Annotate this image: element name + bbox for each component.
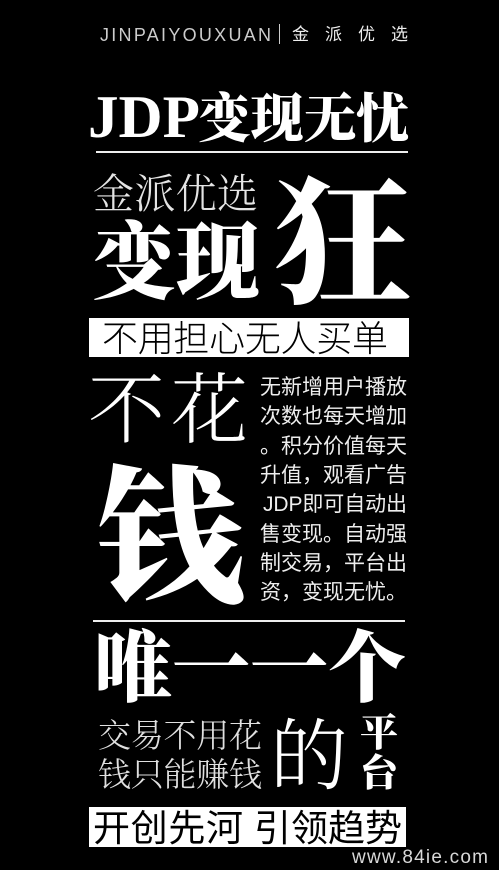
header brand: 金派优选 xyxy=(292,25,408,44)
paragraph: 次数也每天增加 xyxy=(260,405,407,428)
subtext two lines: 钱只能赚钱 xyxy=(98,749,262,796)
paragraph: 制交易，平台出 xyxy=(260,552,407,575)
subtext two lines xyxy=(98,710,262,796)
paragraph: 升值，观看广告 xyxy=(260,464,407,487)
stacked characters: platform: 平 xyxy=(360,713,398,755)
title: JDP xyxy=(88,84,200,150)
paragraph: 无新增用户播放 xyxy=(260,376,407,399)
title underline xyxy=(96,151,408,153)
white banner: pioneering: 开创先河 xyxy=(93,808,243,849)
header brand: JINPAIYOUXUAN xyxy=(100,25,271,45)
subtext two lines: 交易不用花 xyxy=(98,710,262,757)
paragraph: 售变现。自动强 xyxy=(260,523,407,546)
large character: money: 钱 xyxy=(97,459,245,623)
divider line xyxy=(93,620,405,622)
paragraph: 资，变现无忧。 xyxy=(260,581,407,604)
title: 变现无忧 xyxy=(198,89,409,149)
stacked characters: platform xyxy=(360,713,401,795)
white banner: pioneering: 引领趋势 xyxy=(254,808,402,849)
heading: the only one: 唯一一个 xyxy=(94,625,406,712)
slogan: cash out: 变现 xyxy=(92,217,260,311)
watermark: www.84ie.com xyxy=(351,847,488,868)
paragraph xyxy=(260,376,407,604)
white banner: no worries about buyers: 不用担心无人买单 xyxy=(102,318,388,359)
stacked characters: platform: 台 xyxy=(360,753,401,795)
paragraph: 。积分价值每天 xyxy=(260,435,407,458)
header brand xyxy=(100,24,408,45)
large character: crazy: 狂 xyxy=(274,170,411,322)
paragraph: JDP即可自动出 xyxy=(263,493,407,516)
title xyxy=(88,84,409,150)
white banner: pioneering xyxy=(89,807,406,849)
large character: de: 的 xyxy=(270,694,348,806)
slogan: brand name light: 金派优选 xyxy=(93,161,258,220)
heading: no spending: 不花 xyxy=(88,349,248,460)
